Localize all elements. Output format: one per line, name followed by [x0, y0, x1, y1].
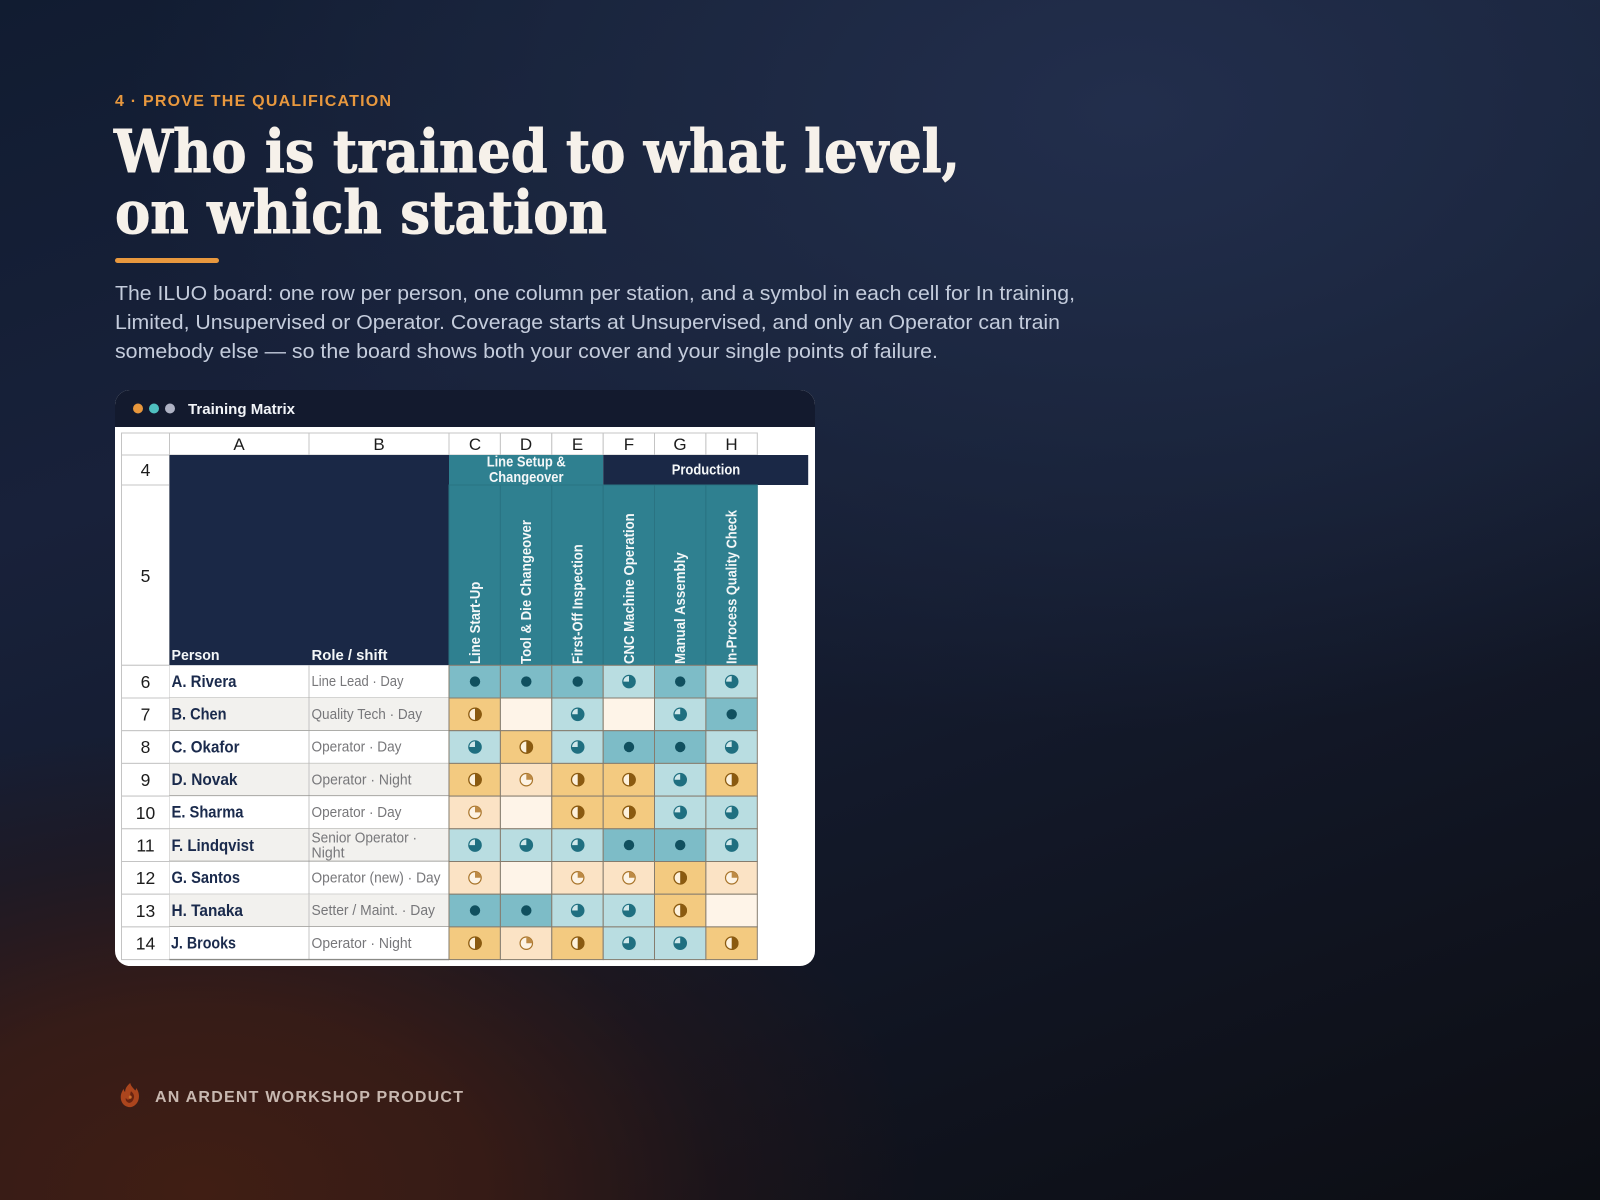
- spreadsheet column letters: H: [725, 435, 738, 454]
- row 11: F. Lindqvist: F. Lindqvist: [172, 836, 254, 855]
- spreadsheet row numbers: 5: [141, 566, 150, 586]
- spreadsheet row numbers: 7: [141, 704, 150, 724]
- station headers: In-Process Quality Check: [724, 509, 740, 664]
- icon: flame logo: [121, 1083, 139, 1107]
- row 14: J. Brooks: J. Brooks: [171, 934, 236, 952]
- row 6: A. Rivera: A. Rivera: [172, 672, 237, 691]
- row 12: G. Santos: [170, 862, 757, 894]
- spreadsheet row numbers: 4: [141, 460, 151, 480]
- row 13: H. Tanaka: [170, 894, 757, 927]
- spreadsheet row numbers: 10: [136, 803, 155, 823]
- header band: line setup and changeover: Changeover: [489, 469, 564, 486]
- spreadsheet column letters: E: [572, 435, 583, 454]
- spreadsheet column letters: B: [373, 435, 385, 454]
- spreadsheet column letters: G: [673, 435, 687, 454]
- header band: line setup and changeover: Line Setup &: [487, 454, 566, 470]
- row 14: J. Brooks: [170, 927, 757, 960]
- row 8: C. Okafor: C. Okafor: [172, 738, 240, 756]
- footer brand text: AN ARDENT WORKSHOP PRODUCT: [155, 1089, 463, 1106]
- row 6: A. Rivera: Line Lead · Day: [312, 674, 404, 690]
- spreadsheet column letters: C: [469, 435, 481, 454]
- row 11: F. Lindqvist: [170, 829, 757, 862]
- station headers: Tool & Die Changeover: [518, 520, 535, 664]
- panel: training matrix window: [115, 390, 815, 966]
- spreadsheet row numbers: 8: [141, 737, 150, 757]
- row 12: G. Santos: Operator (new) · Day: [312, 870, 441, 886]
- header band: line setup and changeover: [449, 454, 603, 486]
- spreadsheet column letters: [122, 433, 757, 455]
- spreadsheet column letters: D: [520, 435, 532, 454]
- row 9: D. Novak: D. Novak: [172, 770, 238, 789]
- title: on which station: [115, 178, 607, 247]
- intro text: The ILUO board: one row per person, one column per station, and a symbol in each cell for In training,: [115, 282, 1075, 305]
- row 9: D. Novak: Operator · Night: [312, 772, 412, 788]
- row 10: E. Sharma: E. Sharma: [172, 802, 244, 822]
- spreadsheet row numbers: 12: [136, 868, 155, 888]
- row 10: E. Sharma: [170, 796, 757, 829]
- header: person and role: [170, 455, 449, 665]
- header: person and role: Role / shift: [312, 647, 388, 664]
- row 13: H. Tanaka: H. Tanaka: [172, 901, 243, 920]
- spreadsheet row numbers: 14: [136, 934, 155, 954]
- spreadsheet column letters: A: [233, 435, 245, 454]
- window title bar: Training Matrix: [188, 401, 296, 418]
- intro text: Limited, Unsupervised or Operator. Coverage starts at Unsupervised, and only an Operator can train: [115, 311, 1060, 334]
- header band: production: [603, 455, 808, 485]
- spreadsheet row numbers: 6: [141, 672, 150, 692]
- station headers: Line Start-Up: [467, 582, 484, 664]
- row 10: E. Sharma: Operator · Day: [312, 805, 402, 821]
- header: person and role: Person: [172, 647, 220, 664]
- row 11: F. Lindqvist: Senior Operator ·: [312, 830, 417, 846]
- station headers: First-Off Inspection: [570, 544, 586, 664]
- title rule: [115, 258, 219, 263]
- header band: production: Production: [672, 462, 740, 478]
- row 9: D. Novak: [170, 763, 757, 796]
- title: [113, 117, 960, 247]
- row 11: F. Lindqvist: Night: [312, 846, 344, 862]
- intro text: somebody else — so the board shows both your cover and your single points of failure.: [115, 340, 938, 363]
- row 13: H. Tanaka: Setter / Maint. · Day: [312, 903, 436, 919]
- window title bar: [115, 390, 815, 427]
- row 6: A. Rivera: [170, 665, 757, 698]
- title: Who is trained to what level,: [113, 117, 960, 186]
- row 12: G. Santos: G. Santos: [172, 868, 240, 887]
- intro text: [115, 282, 1075, 363]
- row 7: B. Chen: Quality Tech · Day: [312, 707, 423, 723]
- spreadsheet row numbers: 9: [141, 770, 150, 790]
- row 7: B. Chen: B. Chen: [172, 704, 226, 724]
- spreadsheet row numbers: 11: [136, 836, 155, 856]
- row 8: C. Okafor: [170, 731, 757, 763]
- station headers: [449, 485, 757, 665]
- spreadsheet column letters: F: [624, 435, 634, 454]
- eyebrow: 4 · PROVE THE QUALIFICATION: [115, 93, 391, 110]
- row 14: J. Brooks: Operator · Night: [312, 936, 412, 952]
- row 7: B. Chen: [170, 698, 757, 731]
- station headers: Manual Assembly: [672, 552, 689, 664]
- spreadsheet row numbers: 13: [136, 901, 155, 921]
- row 8: C. Okafor: Operator · Day: [312, 740, 402, 756]
- station headers: CNC Machine Operation: [621, 513, 638, 664]
- spreadsheet row numbers: [122, 455, 170, 960]
